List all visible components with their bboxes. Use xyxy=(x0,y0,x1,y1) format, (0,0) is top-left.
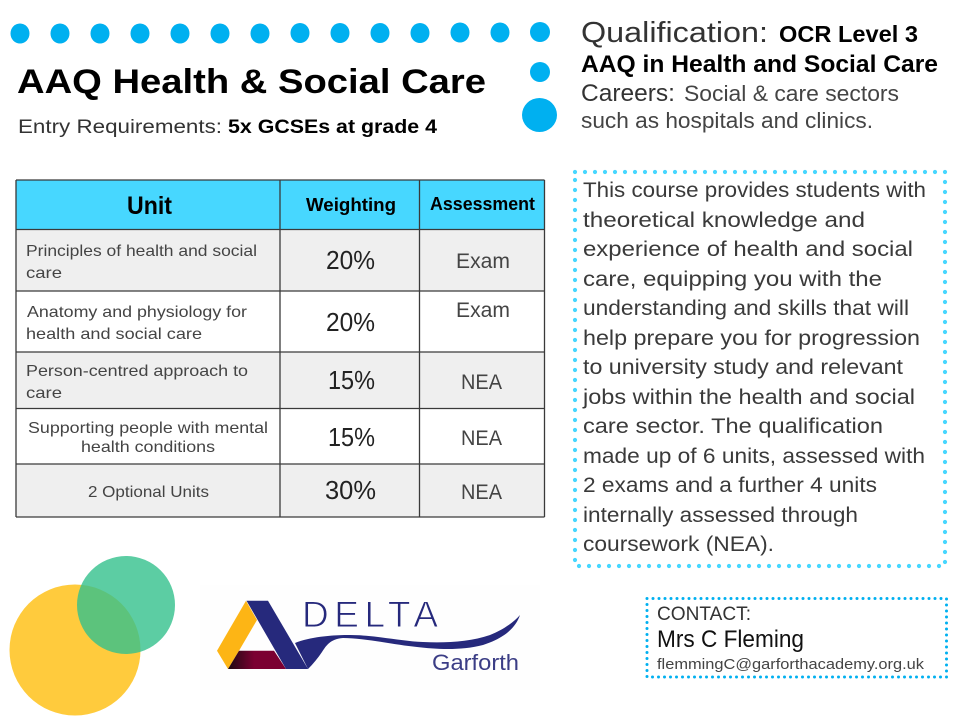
course description panel xyxy=(575,172,945,566)
Delta Garforth logo xyxy=(200,585,540,690)
table row: principles of health and social care: 20% xyxy=(326,245,375,275)
course description panel: help prepare you for progression xyxy=(583,327,920,350)
table row: anatomy and physiology: Anatomy and physiology for xyxy=(27,304,248,321)
course description panel: to university study and relevant xyxy=(583,356,903,379)
Delta Garforth logo: DELTA xyxy=(302,594,438,635)
decorative dotted circle trail xyxy=(10,22,557,132)
course description panel: care, equipping you with the xyxy=(583,268,882,291)
table row: mental health conditions: NEA xyxy=(461,427,502,450)
table row: person-centred approach: 15% xyxy=(328,365,375,395)
qualification and careers text: Qualification: xyxy=(581,17,768,49)
contact box: Mrs C Fleming xyxy=(657,626,804,653)
course description panel: made up of 6 units, assessed with xyxy=(583,445,925,468)
table row: mental health conditions xyxy=(16,408,544,464)
qualification and careers text: Careers: xyxy=(581,80,675,107)
table row: anatomy and physiology: health and social care xyxy=(26,326,202,343)
table row: principles of health and social care: Principles of health and social xyxy=(26,243,257,260)
table row: anatomy and physiology xyxy=(16,291,544,352)
course description panel: care sector. The qualification xyxy=(583,415,883,438)
entry requirements: 5x GCSEs at grade 4 xyxy=(228,117,437,138)
table header row: Assessment xyxy=(430,194,535,214)
overlapping circles xyxy=(10,556,175,716)
contact box xyxy=(647,598,946,677)
table row: mental health conditions: health conditions xyxy=(81,439,215,456)
table header row xyxy=(16,180,544,230)
table row: person-centred approach: Person-centred approach to xyxy=(26,363,248,380)
table row: anatomy and physiology: 20% xyxy=(326,307,375,337)
qualification and careers text: such as hospitals and clinics. xyxy=(581,108,873,133)
course description panel: 2 exams and a further 4 units xyxy=(583,474,877,497)
table header row: Unit xyxy=(127,192,173,220)
table row: mental health conditions: Supporting people with mental xyxy=(28,420,268,437)
qualification and careers text: OCR Level 3 xyxy=(779,21,918,47)
table row: person-centred approach xyxy=(16,352,544,408)
course description panel: theoretical knowledge and xyxy=(583,209,865,232)
table row: mental health conditions: 15% xyxy=(328,422,375,452)
table row: person-centred approach: NEA xyxy=(461,371,502,394)
table row: principles of health and social care: care xyxy=(26,265,62,282)
qualification and careers text: AAQ in Health and Social Care xyxy=(581,51,938,78)
table row: optional units: 30% xyxy=(325,475,376,505)
contact box: CONTACT: xyxy=(657,604,751,625)
table row: principles of health and social care: Exam xyxy=(456,250,510,273)
table row: anatomy and physiology: Exam xyxy=(456,299,510,322)
course description panel: internally assessed through xyxy=(583,504,858,527)
course description panel: coursework (NEA). xyxy=(583,533,774,556)
Delta Garforth logo: Garforth xyxy=(432,650,519,675)
course description panel: jobs within the health and social xyxy=(582,386,915,409)
course description panel: This course provides students with xyxy=(583,179,926,202)
table row: optional units xyxy=(16,464,544,517)
contact box: flemmingC@garforthacademy.org.uk xyxy=(657,656,925,673)
units table xyxy=(16,180,544,517)
entry requirements: Entry Requirements: xyxy=(18,117,222,138)
course description panel: experience of health and social xyxy=(583,238,913,261)
qualification and careers text xyxy=(581,17,938,133)
table row: person-centred approach: care xyxy=(26,385,62,402)
qualification and careers text: Social & care sectors xyxy=(684,81,899,106)
table header row: Weighting xyxy=(306,195,396,215)
table row: principles of health and social care xyxy=(16,230,544,291)
table row: optional units: NEA xyxy=(461,481,502,504)
course description panel: understanding and skills that will xyxy=(583,297,909,320)
table row: optional units: 2 Optional Units xyxy=(88,484,209,501)
title: AAQ Health & Social Care xyxy=(17,63,486,101)
entry requirements xyxy=(18,117,437,138)
